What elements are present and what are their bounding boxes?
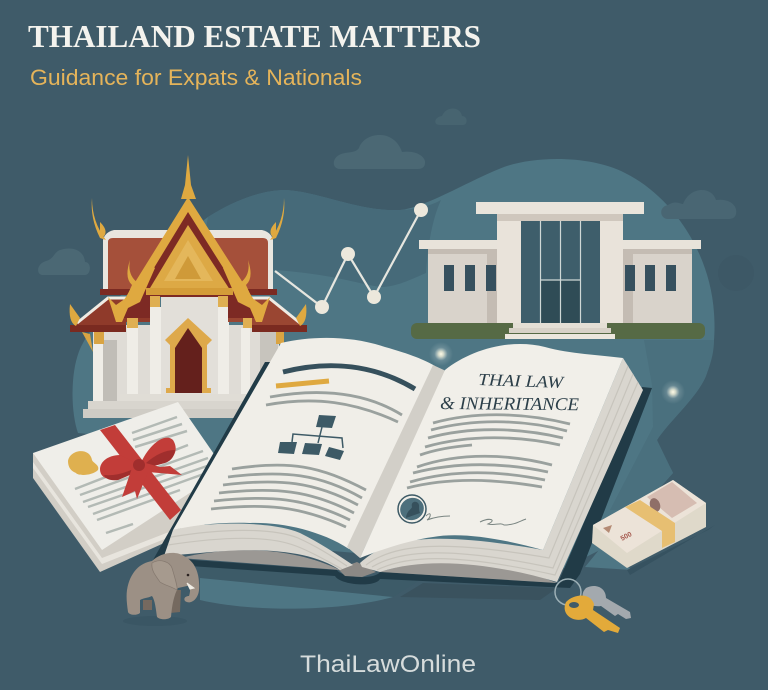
gift document stack — [33, 402, 225, 572]
glass entrance — [521, 221, 600, 323]
cloud: left — [38, 248, 90, 275]
text lines — [75, 417, 212, 533]
gable pediment — [147, 225, 232, 293]
temple upper roof — [103, 230, 273, 295]
roof finials — [70, 198, 306, 326]
gold key — [565, 596, 620, 633]
wing windows — [444, 265, 676, 291]
top sheet — [33, 402, 225, 550]
page stack left — [164, 524, 353, 570]
seal and signatures — [396, 494, 526, 525]
stack side — [33, 453, 215, 572]
cloud: right — [661, 190, 736, 219]
modern government building — [411, 202, 705, 339]
temple — [70, 155, 307, 418]
side wings — [428, 250, 692, 323]
central gable — [120, 205, 258, 318]
book title: THAI LAW — [478, 370, 566, 392]
left page body lines — [211, 465, 366, 527]
icon: family tree — [278, 415, 344, 460]
cloud: small top — [435, 108, 467, 125]
temple steps — [120, 394, 270, 401]
spire — [181, 155, 196, 199]
wax seal — [68, 451, 98, 475]
cloud: top centre — [334, 135, 425, 169]
steps — [513, 323, 607, 328]
left page — [173, 338, 435, 549]
subtitle: Guidance for Expats & Nationals — [30, 65, 362, 90]
book title: & INHERITANCE — [440, 393, 579, 414]
central block — [497, 212, 623, 323]
lower roofs — [72, 298, 150, 331]
sparkle lights — [429, 342, 685, 404]
right page lines — [407, 415, 570, 488]
footer brand: ThaiLawOnline — [300, 651, 476, 678]
line chart — [275, 203, 428, 314]
ribbon — [100, 425, 181, 520]
hedges — [411, 323, 705, 339]
left page heading bars — [283, 366, 415, 389]
banknote stack — [592, 480, 715, 575]
background blob — [73, 159, 715, 609]
elephant — [123, 553, 199, 626]
faint gear mark — [718, 255, 754, 291]
gable scroll ornaments — [108, 260, 155, 322]
title: THAILAND ESTATE MATTERS — [28, 19, 481, 54]
page stack right — [360, 358, 643, 582]
silver key — [583, 586, 631, 619]
keys — [555, 579, 631, 633]
temple door — [165, 318, 212, 393]
under-page shadow — [180, 550, 340, 570]
body — [93, 325, 279, 404]
right page — [360, 344, 623, 558]
book cover — [153, 362, 652, 588]
open book — [153, 338, 652, 588]
banknote stack: 500 — [620, 531, 633, 543]
clouds — [38, 108, 736, 275]
book title — [440, 370, 579, 414]
money shadow — [627, 525, 715, 575]
gutter — [347, 365, 446, 558]
